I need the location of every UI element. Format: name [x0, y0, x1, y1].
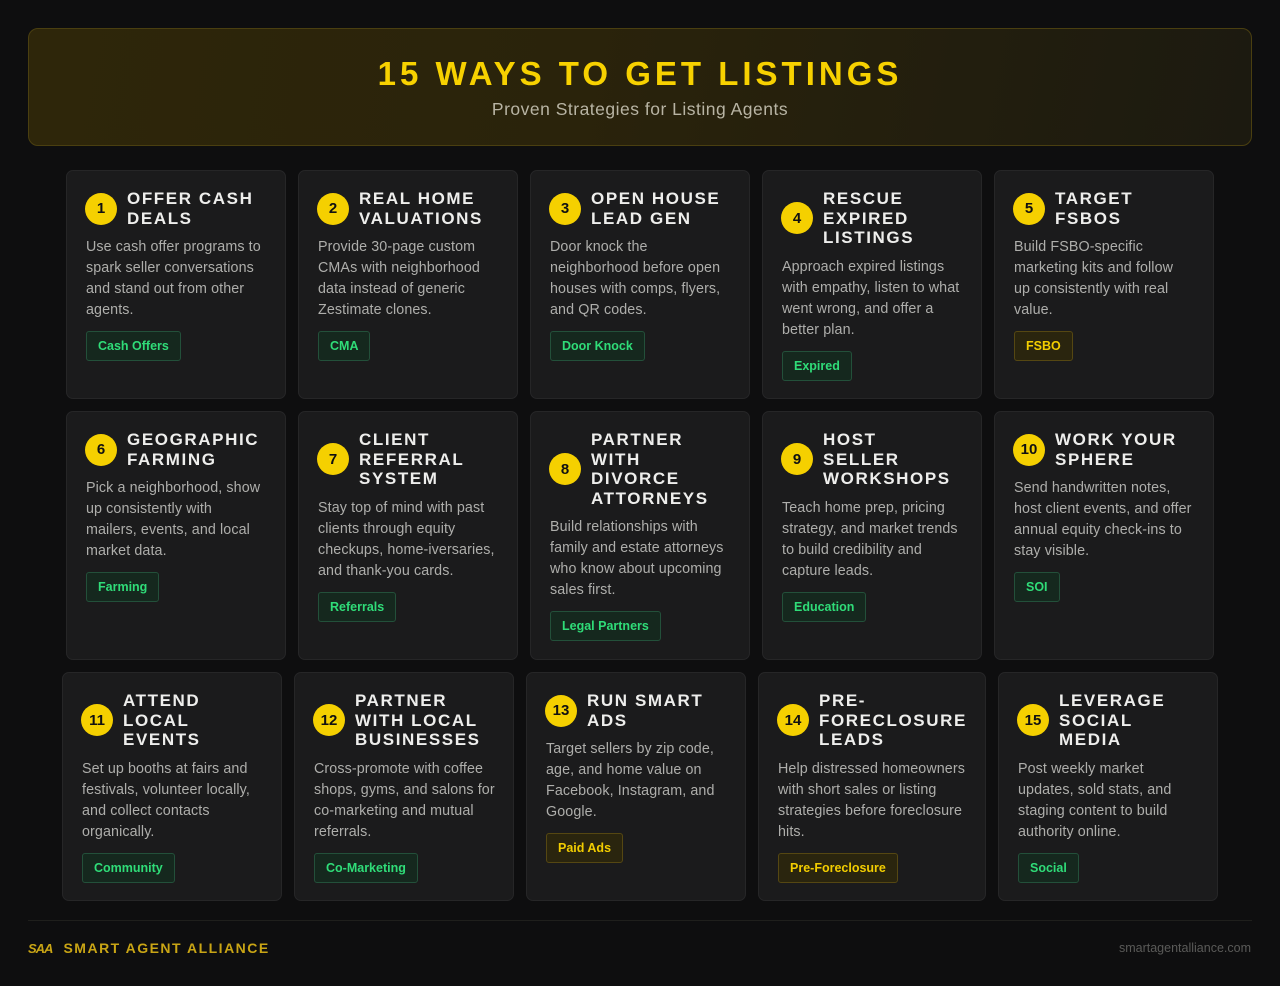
card 7: and thank-you cards.	[318, 562, 454, 578]
card 9: Teach home prep, pricing	[782, 500, 945, 516]
card 10: stay visible.	[1014, 543, 1089, 559]
card 11: Set up booths at fairs and	[82, 760, 248, 776]
card 6: mailers, events, and local	[86, 522, 250, 538]
card 5: marketing kits and follow	[1014, 260, 1173, 276]
card 14: hits.	[778, 824, 805, 840]
card 15: updates, sold stats, and	[1018, 782, 1171, 798]
card 8: PARTNER	[591, 430, 683, 449]
card 9: Education	[794, 600, 854, 614]
card 12: BUSINESSES	[355, 730, 481, 749]
card 10: WORK YOUR	[1055, 430, 1177, 449]
card 12: shops, gyms, and salons for	[314, 782, 495, 798]
card 6: Farming	[98, 580, 147, 594]
card 13: age, and home value on	[546, 762, 702, 778]
card 9: to build credibility and	[782, 542, 922, 558]
card 3: 3	[561, 200, 569, 217]
card 11: ATTEND	[123, 691, 200, 710]
card 14: FORECLOSURE	[819, 710, 967, 730]
card 5: Build FSBO-specific	[1014, 239, 1143, 255]
card 1: DEALS	[127, 208, 193, 228]
card 9: SELLER	[823, 450, 900, 468]
card 6: FARMING	[127, 450, 217, 468]
card 14: PRE-	[819, 691, 866, 710]
card 3	[530, 170, 750, 399]
card 13: Facebook, Instagram, and	[546, 783, 714, 799]
card 9	[762, 411, 982, 660]
card 6: market data.	[86, 543, 167, 559]
card 11: LOCAL	[123, 710, 190, 730]
card 1: agents.	[86, 302, 134, 318]
card 12: referrals.	[314, 824, 371, 840]
card 5: FSBOS	[1055, 208, 1122, 228]
card 9: capture leads.	[782, 562, 873, 578]
card 13: Google.	[546, 804, 597, 820]
card 8	[530, 411, 750, 660]
card 11: festivals, volunteer locally,	[82, 782, 250, 798]
card 2: 2	[329, 200, 337, 217]
card 10: annual equity check-ins to	[1014, 522, 1182, 538]
title: 15 WAYS TO GET LISTINGS	[378, 55, 902, 92]
card 3: LEAD GEN	[591, 208, 692, 228]
card 13	[526, 672, 746, 901]
card 10: SPHERE	[1055, 450, 1135, 468]
card 12: WITH LOCAL	[355, 710, 478, 730]
card 11	[62, 672, 282, 901]
card 10: host client events, and offer	[1014, 501, 1192, 517]
card 8: WITH	[591, 450, 641, 468]
card 3: Door knock the	[550, 239, 648, 255]
card 5: value.	[1014, 302, 1053, 318]
card 7: clients through equity	[318, 520, 455, 536]
card 14: Pre-Foreclosure	[790, 860, 886, 874]
card 14: Help distressed homeowners	[778, 760, 965, 776]
card 8: 8	[561, 460, 569, 478]
card 1: 1	[97, 200, 105, 217]
card 15: 15	[1025, 712, 1041, 729]
header banner	[28, 28, 1252, 146]
card 8: Legal Partners	[562, 619, 649, 633]
card 7: SYSTEM	[359, 469, 439, 488]
card 3: neighborhood before open	[550, 260, 720, 276]
card 9: 9	[793, 451, 801, 468]
card 12: PARTNER	[355, 691, 447, 710]
card 6: GEOGRAPHIC	[127, 430, 259, 449]
card 15: staging content to build	[1018, 802, 1167, 818]
card 13: Paid Ads	[558, 841, 611, 855]
card 3: and QR codes.	[550, 302, 647, 318]
card 7: checkups, home-iversaries,	[318, 542, 495, 558]
card 8: ATTORNEYS	[591, 488, 709, 508]
card 13: 13	[553, 702, 569, 719]
subtitle: Proven Strategies for Listing Agents	[492, 99, 788, 119]
card 2: Zestimate clones.	[318, 302, 432, 318]
card 4: LISTINGS	[823, 228, 914, 247]
card 2: data instead of generic	[318, 281, 465, 297]
card 6: up consistently with	[86, 501, 212, 517]
card 15: authority online.	[1018, 824, 1121, 840]
card 9: HOST	[823, 430, 877, 449]
card 15: LEVERAGE	[1059, 691, 1165, 710]
card 2: CMAs with neighborhood	[318, 260, 480, 276]
card 14	[758, 672, 986, 901]
card 4: with empathy, listen to what	[782, 280, 959, 296]
card 4: EXPIRED	[823, 208, 909, 228]
card 5: up consistently with real	[1014, 281, 1168, 297]
card 7: Stay top of mind with past	[318, 500, 484, 516]
card 13: Target sellers by zip code,	[546, 741, 714, 757]
card 8: Build relationships with	[550, 519, 698, 535]
card 2: REAL HOME	[359, 189, 475, 208]
card 12: Co-Marketing	[326, 860, 406, 874]
card 13: ADS	[587, 710, 628, 730]
card 4	[762, 170, 982, 399]
card 10: Send handwritten notes,	[1014, 480, 1170, 496]
card 15: Social	[1030, 860, 1067, 874]
card 14: LEADS	[819, 730, 885, 749]
card 8: who know about upcoming	[550, 561, 722, 577]
card 6: Pick a neighborhood, show	[86, 480, 260, 496]
card 4: went wrong, and offer a	[782, 300, 933, 316]
footer brand logo: SMART AGENT ALLIANCE	[63, 940, 270, 956]
card 12: 12	[321, 712, 337, 729]
card 15: MEDIA	[1059, 730, 1122, 749]
card 8: family and estate attorneys	[550, 540, 724, 556]
card 10	[994, 411, 1214, 660]
card 3: houses with comps, flyers,	[550, 281, 720, 297]
card 5: TARGET	[1055, 189, 1133, 208]
card 8: sales first.	[550, 582, 616, 598]
card 9: WORKSHOPS	[823, 469, 951, 488]
card 2	[298, 170, 518, 399]
card 5: 5	[1025, 200, 1033, 217]
card 15: Post weekly market	[1018, 760, 1144, 776]
card 3: OPEN HOUSE	[591, 189, 720, 208]
card 2: CMA	[330, 339, 358, 353]
card 10: SOI	[1026, 580, 1048, 594]
card 15	[998, 672, 1218, 901]
card 11: 11	[89, 712, 105, 729]
card 15: SOCIAL	[1059, 710, 1133, 730]
card 1: Use cash offer programs to	[86, 239, 261, 255]
footer brand logo: SAA	[28, 940, 52, 956]
card 12: Cross-promote with coffee	[314, 760, 483, 776]
card 4: 4	[793, 210, 801, 227]
card 10: 10	[1021, 441, 1037, 458]
card 2: Provide 30-page custom	[318, 239, 475, 255]
card 1	[66, 170, 286, 399]
card 11: organically.	[82, 824, 154, 840]
card 11: and collect contacts	[82, 802, 210, 818]
card 8: DIVORCE	[591, 469, 680, 488]
footer url: smartagentalliance.com	[1119, 941, 1251, 955]
card 5	[994, 170, 1214, 399]
card 6	[66, 411, 286, 660]
card 4: better plan.	[782, 322, 855, 338]
card 7: CLIENT	[359, 430, 430, 449]
card 1: spark seller conversations	[86, 260, 254, 276]
card 4: Approach expired listings	[782, 258, 944, 274]
card 6: 6	[97, 441, 105, 458]
card 7	[298, 411, 518, 660]
card 5: FSBO	[1026, 339, 1061, 353]
card 13: RUN SMART	[587, 691, 703, 710]
card 1: OFFER CASH	[127, 189, 254, 208]
card 1: Cash Offers	[98, 339, 169, 353]
card 7: Referrals	[330, 600, 384, 614]
card 11: Community	[94, 860, 163, 874]
card 4: RESCUE	[823, 189, 903, 208]
card 4: Expired	[794, 358, 840, 372]
card 1: and stand out from other	[86, 281, 244, 297]
card 11: EVENTS	[123, 730, 201, 749]
card 14: strategies before foreclosure	[778, 802, 962, 818]
card 9: strategy, and market trends	[782, 520, 958, 536]
card 3: Door Knock	[562, 339, 633, 353]
card 7: 7	[329, 451, 337, 468]
card 12	[294, 672, 514, 901]
card 12: co-marketing and mutual	[314, 802, 474, 818]
card 14: with short sales or listing	[778, 782, 936, 798]
card 2: VALUATIONS	[359, 208, 483, 228]
card 7: REFERRAL	[359, 450, 464, 468]
card 14: 14	[785, 712, 801, 729]
